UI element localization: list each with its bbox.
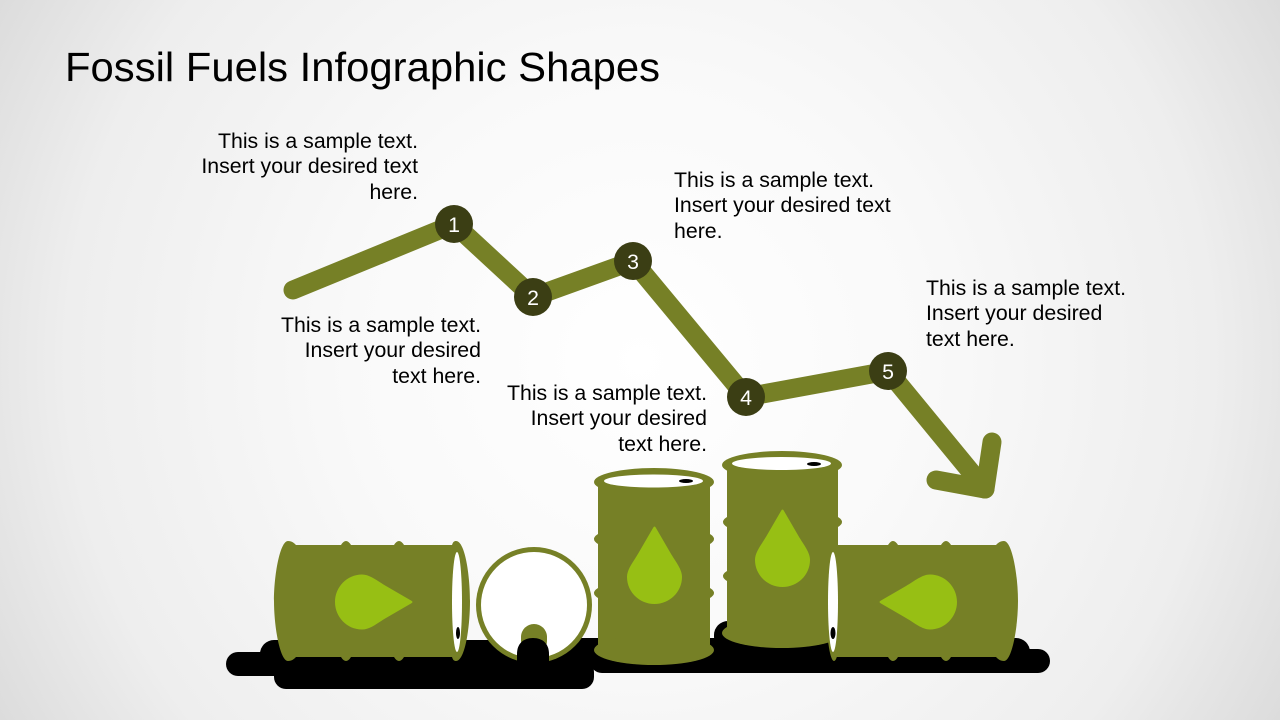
marker 1 <box>435 205 473 243</box>
text block: step 4 <box>507 381 707 456</box>
marker 2: 2 <box>527 286 539 310</box>
text block: step 3: Insert your desired text <box>674 193 891 217</box>
text block: step 4: Insert your desired <box>531 406 707 430</box>
text block: step 5: Insert your desired <box>926 301 1102 325</box>
text block: step 3: here. <box>674 219 723 243</box>
barrel: lying left <box>274 541 470 661</box>
marker 1: 1 <box>448 213 460 237</box>
text block: step 4: This is a sample text. <box>507 381 707 405</box>
title: Fossil Fuels Infographic Shapes <box>65 44 660 90</box>
barrel: lying right <box>826 541 1018 661</box>
text block: step 5 <box>926 276 1126 351</box>
text block: step 2: text here. <box>392 364 481 388</box>
declining line arrow <box>293 224 992 489</box>
oil puddle <box>226 621 1050 689</box>
marker 4: 4 <box>740 386 752 410</box>
text block: step 5: text here. <box>926 327 1015 351</box>
text block: step 5: This is a sample text. <box>926 276 1126 300</box>
text block: step 2 <box>281 313 481 388</box>
marker 5 <box>869 352 907 390</box>
barrel: standing front <box>594 468 714 665</box>
marker 5: 5 <box>882 360 894 384</box>
text block: step 2: Insert your desired <box>305 338 481 362</box>
text block: step 1: here. <box>369 180 418 204</box>
text block: step 3 <box>674 168 891 243</box>
marker 3: 3 <box>627 250 639 274</box>
marker 3 <box>614 242 652 280</box>
text block: step 3: This is a sample text. <box>674 168 874 192</box>
marker 4 <box>727 378 765 416</box>
text block: step 1 <box>201 129 418 204</box>
barrel: upright opening facing viewer <box>476 547 592 672</box>
text block: step 1: This is a sample text. <box>218 129 418 153</box>
text block: step 1: Insert your desired text <box>201 154 418 178</box>
barrel: standing back <box>722 451 842 648</box>
marker 2 <box>514 278 552 316</box>
text block: step 4: text here. <box>618 432 707 456</box>
text block: step 2: This is a sample text. <box>281 313 481 337</box>
